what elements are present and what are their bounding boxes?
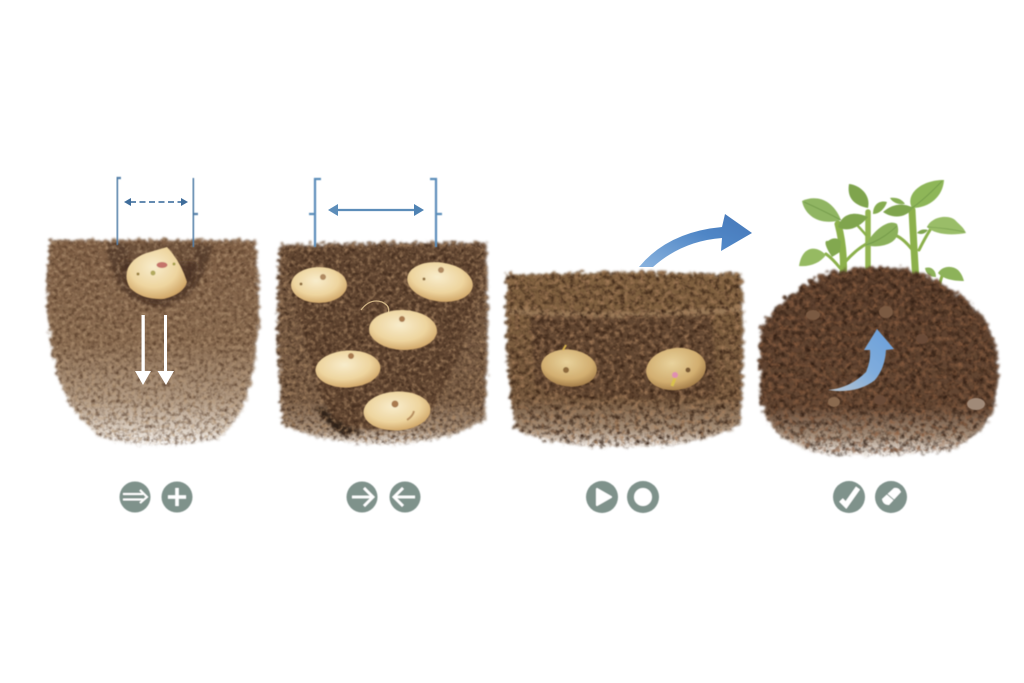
leaf: right plant top — [910, 180, 944, 208]
potato: top left — [291, 267, 347, 303]
panel: mound with sprouting plants — [759, 180, 998, 455]
icon: plus — [162, 482, 192, 512]
icon: double arrow — [120, 482, 150, 512]
leaf: right plant stub — [917, 229, 928, 234]
leaf: inner lower — [825, 238, 841, 257]
leaf: large left — [802, 198, 841, 222]
panel: narrow planting hole — [47, 178, 259, 445]
curved blue arrow — [639, 214, 752, 267]
icon pair 4 — [833, 481, 907, 513]
potato: lower left — [315, 349, 381, 389]
leaf: right plant left — [883, 205, 913, 217]
icon: stop circle — [627, 481, 659, 513]
leaf: small centre right — [873, 202, 887, 214]
right bracket — [193, 178, 198, 247]
icon: right arrow — [346, 482, 378, 512]
pit shadow — [122, 262, 197, 302]
panel: wide trench with five potatoes — [278, 179, 488, 444]
leaf: right plant upper small — [890, 198, 905, 204]
leaf: tall centre top — [849, 184, 869, 208]
leaf: sprout right — [938, 267, 964, 281]
stems — [826, 210, 942, 290]
leaf: lower left — [799, 249, 826, 266]
plants — [799, 180, 966, 290]
left bracket — [309, 179, 321, 247]
soil mound — [759, 267, 998, 455]
left bracket — [117, 178, 121, 245]
icon pair 2 — [346, 482, 420, 512]
icon pair 3 — [586, 481, 659, 513]
double-headed width arrow — [328, 204, 424, 216]
icon: play — [586, 481, 618, 513]
leaf: right plant right — [927, 217, 966, 234]
soil block 3 — [506, 272, 743, 447]
root strand — [361, 301, 389, 314]
potato piece — [126, 247, 187, 299]
icon pair 1 — [120, 482, 192, 512]
leaf: left mid — [838, 214, 868, 229]
curved up arrow — [828, 329, 894, 391]
potato: top right — [405, 258, 475, 306]
clods on mound — [806, 306, 985, 410]
leaf: centre large — [866, 223, 898, 246]
white depth arrows — [135, 315, 174, 385]
leaf: sprout left — [925, 267, 936, 277]
potato: right covered with sprout — [643, 344, 709, 394]
potato: bottom — [363, 390, 431, 432]
right bracket — [430, 179, 442, 247]
icon: check mark — [833, 481, 865, 513]
icon: eraser — [875, 481, 907, 513]
icon: left arrow — [390, 482, 420, 512]
dashed width arrow — [124, 198, 188, 206]
panel: covered potatoes — [506, 214, 752, 447]
potato: middle — [368, 309, 438, 351]
soil block 2 — [278, 243, 488, 444]
potato: left covered — [539, 345, 599, 389]
soil block 1 — [47, 240, 259, 445]
